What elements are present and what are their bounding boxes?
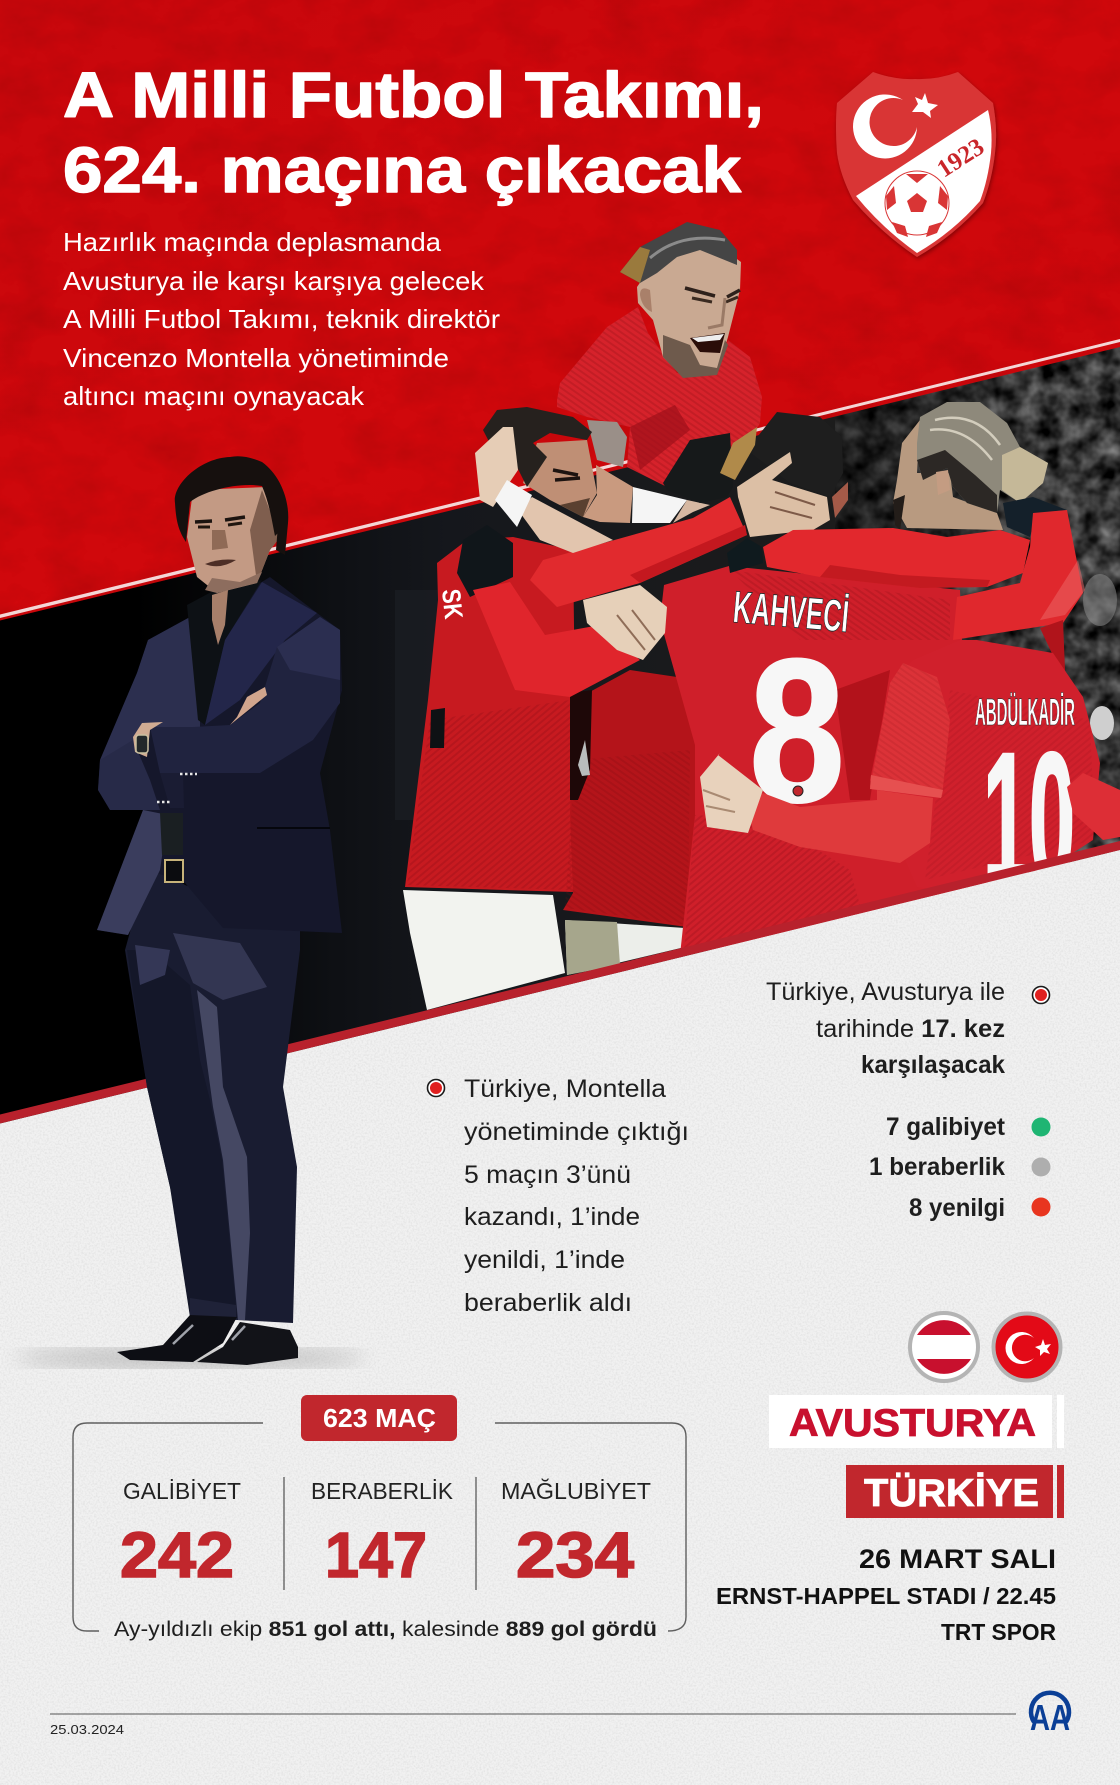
team label: Turkey [846,1465,1064,1518]
panel: red header background [0,0,1120,620]
crest year: 1923 [932,133,989,183]
bullet [428,1080,444,1096]
legend: wins: 7 galibiyet [886,1113,1006,1141]
paragraph [464,1075,689,1317]
logo: Turkish Football Federation crest [836,72,996,257]
date: 25.03.2024 [50,1722,124,1737]
stat: losses: 234 [516,1519,634,1591]
jersey name: KAHVECİ [731,581,851,642]
badge: total matches [301,1395,457,1441]
match details: ERNST-HAPPEL STADI / 22.45 [716,1583,1056,1609]
player: right player's arms [727,497,1085,720]
title [63,59,764,206]
logo: Anadolu Agency: AA [1030,1697,1070,1738]
diagonal red band [0,841,1120,1124]
paragraph: Türkiye, Montella [464,1075,666,1103]
panel frame [73,1423,686,1631]
player: white shorts [403,890,685,1010]
player: arm and hand on the back [700,753,933,863]
player: left player jersey [405,537,575,892]
team label: Austria [769,1395,1064,1448]
stat: wins: 242 [120,1519,234,1591]
callout: head to head against Austria [766,978,1050,1222]
text block: intro paragraph: Vincenzo Montella yönetiminde [63,343,449,373]
paragraph: karşılaşacak [861,1051,1005,1079]
paragraph: 5 maçın 3’ünü [464,1161,631,1189]
match details [716,1544,1056,1645]
stat: losses: MAĞLUBİYET [501,1478,651,1504]
player: hand on the left player [583,585,667,660]
panel: dark stadium background [0,342,1120,1124]
manager head [175,456,288,593]
panel: all-time record [73,1395,686,1641]
text block: intro paragraph: Avusturya ile karşı karşıya gelecek [63,266,485,296]
icon: Turkey flag [994,1314,1060,1380]
manager trousers [125,860,300,1323]
manager floor shadow [15,1349,365,1367]
illustration: Vincenzo Montella standing [97,456,342,1365]
team label: Turkey: TÜRKİYE [864,1472,1039,1515]
paragraph [766,978,1005,1079]
paragraph: yenildi, 1’inde [464,1246,625,1274]
stat: draws: BERABERLİK [311,1478,454,1504]
crest football [885,171,949,237]
paragraph: Türkiye, Avusturya ile [766,978,1005,1006]
crest crescent [853,94,917,158]
panel: paper lower background [0,850,1120,1785]
player: left player's head [475,407,710,553]
title: A Milli Futbol Takımı, [63,59,764,131]
player: top jumping player [557,222,762,487]
player: ABDÜLKADİR back [870,640,1120,926]
player: black glove [457,525,513,597]
text block: intro paragraph: A Milli Futbol Takımı, teknik direktör [63,304,500,334]
match details: 26 MART SALI [859,1544,1056,1574]
bullet [1032,986,1050,1004]
match details: TRT SPOR [941,1619,1056,1645]
manager shoes [117,1315,298,1365]
player: KAHVECİ back [660,566,1000,955]
team label: Austria: AVUSTURYA [789,1402,1036,1445]
player: centre heads [663,412,848,537]
player: centre player jersey [563,670,695,927]
text block: intro paragraph: Hazırlık maçında deplasmanda [63,227,442,257]
footer rule [50,1713,1016,1715]
player: right player with hair bun [893,402,1048,530]
badge: total matches: 623 MAÇ [323,1403,436,1433]
goals summary: Ay-yıldızlı ekip 851 gol attı, kalesinde 889 gol gördü [114,1617,657,1641]
callout: Montella record [428,1075,689,1317]
stat: losses [501,1478,651,1591]
paragraph: yönetiminde çıktığı [464,1118,689,1146]
title: 624. maçına çıkacak [63,134,741,206]
text block: intro paragraph [63,227,500,411]
player: left player jersey: SK [436,587,469,621]
text block: intro paragraph: altıncı maçını oynayacak [63,381,365,411]
legend: losses: 8 yenilgi [909,1194,1005,1222]
stat: draws [311,1478,454,1591]
manager jacket [97,577,342,935]
player: sleeve arm around left [473,497,747,697]
icon: Austria flag [910,1313,978,1381]
illustration: celebrating football players [403,222,1120,1010]
paragraph: kazandı, 1’inde [464,1203,640,1231]
legend: draws: 1 beraberlik [869,1153,1005,1181]
stat: wins: GALİBİYET [123,1478,241,1504]
paragraph: tarihinde 17. kez [816,1015,1005,1043]
jersey number: 8 [749,617,845,845]
stat: draws: 147 [325,1519,427,1591]
paragraph: beraberlik aldı [464,1289,632,1317]
crest star [912,93,938,118]
stat: wins [120,1478,241,1591]
